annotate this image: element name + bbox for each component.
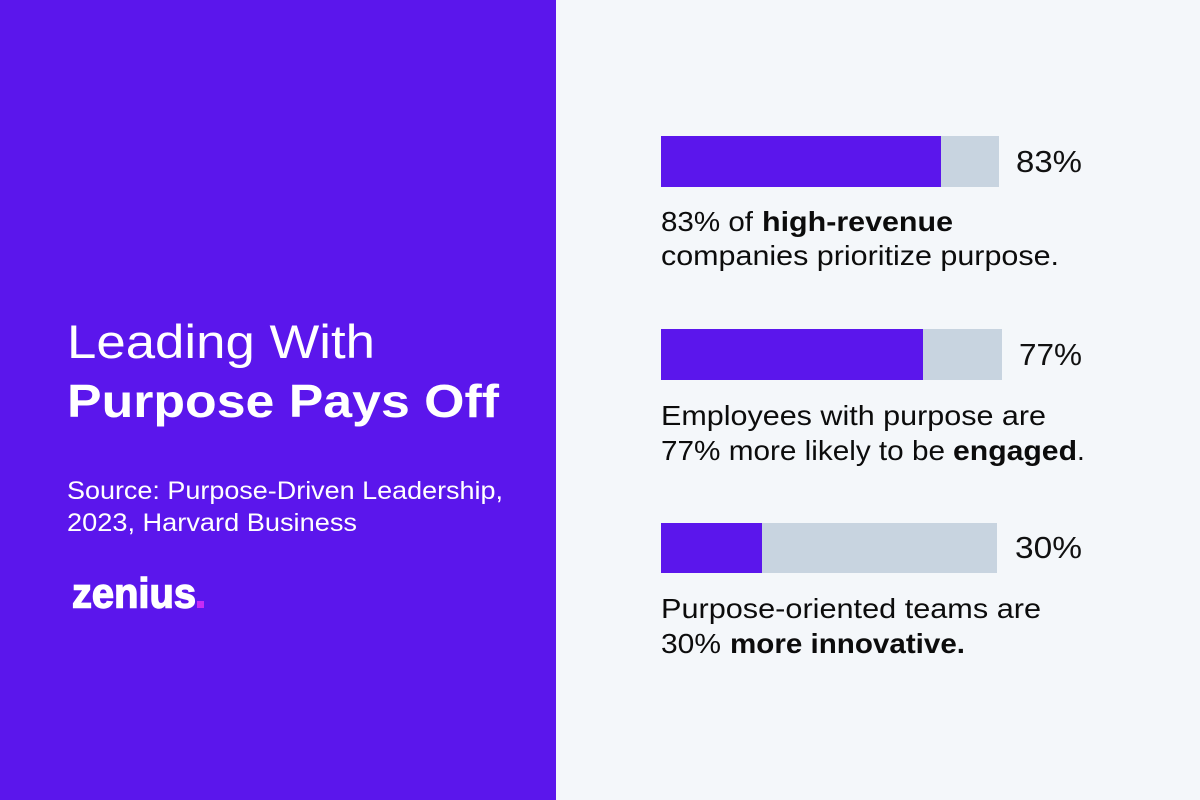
stat: 30% more innovative	[661, 523, 1082, 659]
description: 30%: more innovative.	[730, 628, 965, 659]
description: 83%: high-revenue	[762, 206, 953, 237]
panel: purple title panel	[0, 0, 556, 800]
bar chart: 77%	[661, 329, 1002, 380]
stat: 77% engaged employees	[661, 329, 1085, 466]
logo: zenius: zenius	[72, 570, 196, 616]
description: 77%: .	[1077, 435, 1085, 466]
description: 77%: Employees with purpose are	[661, 400, 1046, 431]
description: 77%	[661, 400, 1085, 466]
title: Leading With	[67, 315, 375, 368]
description: 83%: 83% of	[661, 206, 753, 237]
title: Purpose Pays Off	[67, 375, 500, 427]
value: 77%: 77%	[1019, 337, 1082, 372]
value: 83%: 83%	[1016, 144, 1082, 179]
description: 30%: 30%	[661, 628, 721, 659]
description: 77%: 77% more likely to be	[661, 435, 945, 466]
title	[67, 315, 500, 427]
description: 83%	[661, 206, 1059, 271]
bar chart: 83%	[661, 136, 999, 187]
value: 30%: 30%	[1015, 530, 1082, 565]
bar chart: 30%	[661, 523, 997, 573]
stat: 83% high-revenue companies	[661, 136, 1082, 271]
description: 30%: Purpose-oriented teams are	[661, 593, 1041, 624]
source text	[67, 477, 503, 537]
description: 83%: companies prioritize purpose.	[661, 240, 1059, 271]
source text: 2023, Harvard Business	[67, 509, 357, 537]
source text: Source: Purpose-Driven Leadership,	[67, 477, 503, 505]
description: 30%	[661, 593, 1041, 659]
description: 77%: engaged	[953, 435, 1077, 466]
